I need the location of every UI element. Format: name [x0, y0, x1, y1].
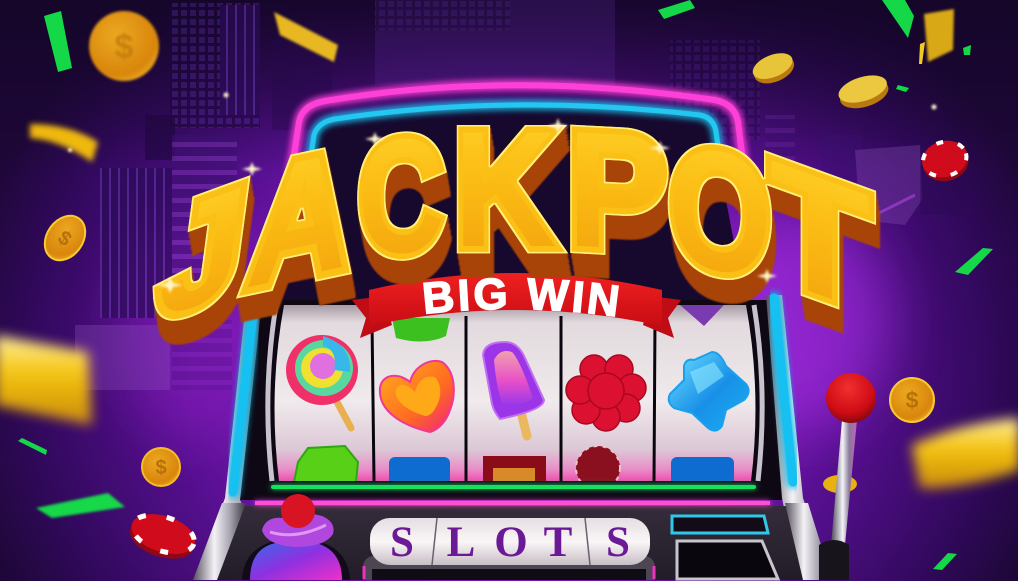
- lever shaft: [831, 420, 857, 545]
- coin: lower left: $: [155, 457, 167, 479]
- coin: top flat: [749, 48, 798, 89]
- reels frame: [232, 300, 798, 500]
- slots text: S: [390, 519, 414, 566]
- big win banner: [369, 273, 662, 326]
- gold streak: upper left: [30, 124, 98, 162]
- slots text: O: [494, 519, 528, 566]
- slot machine: [193, 75, 876, 580]
- left chrome rail: [193, 302, 262, 580]
- jackpot title: P: [567, 97, 667, 286]
- symbol: blue star: [669, 352, 749, 431]
- coin: blurred top left: $: [115, 28, 134, 66]
- right chrome rail: [766, 295, 832, 580]
- cherry: [281, 494, 315, 528]
- coin: left: $: [54, 227, 75, 251]
- symbol: blue candy: [389, 457, 450, 481]
- symbol: heart: [380, 361, 454, 432]
- symbol: diamond top: [680, 305, 724, 326]
- banner text: BIG WIN: [423, 278, 619, 317]
- jackpot title: C: [358, 104, 444, 289]
- cupcake: [242, 494, 350, 580]
- coin: blurred top left: [89, 11, 159, 81]
- gold streak: right: [912, 418, 1018, 488]
- symbol: red square: [483, 456, 546, 481]
- coin: right: [890, 378, 934, 422]
- chip: right: [918, 136, 973, 186]
- coin: right flat: [835, 70, 892, 114]
- reel drum: [275, 305, 755, 481]
- gold bar: top right: [924, 9, 954, 62]
- symbol: lollipop: [286, 335, 358, 428]
- symbol: green cube: [294, 446, 358, 482]
- lower cabinet: [208, 506, 822, 580]
- reels: [271, 305, 756, 490]
- jackpot title: O: [668, 109, 772, 315]
- chip: lower left: [125, 507, 200, 566]
- coins: [36, 11, 934, 486]
- jackpot title: A: [241, 113, 361, 324]
- jackpot title: T: [770, 123, 870, 350]
- neon arch: cyan: [308, 105, 722, 175]
- sparkles: [68, 92, 936, 293]
- green neon line: [271, 485, 756, 489]
- pink neon line: [255, 501, 770, 505]
- left neon tube: [233, 304, 254, 492]
- gold sliver: [919, 42, 925, 64]
- red ribbon tails: [352, 296, 681, 338]
- neon arch: pink: [291, 85, 745, 178]
- lever base: [819, 540, 849, 580]
- gold streak: top center: [274, 12, 338, 62]
- slots text: T: [544, 519, 573, 566]
- right neon tube: [774, 298, 793, 482]
- coin: lower left: [142, 448, 180, 486]
- slots text: [390, 519, 630, 566]
- gold streak: large left: [0, 335, 92, 425]
- control slots: [672, 516, 778, 579]
- reel side chrome: [268, 305, 276, 481]
- jackpot title: K: [454, 97, 556, 281]
- city skyline: [75, 0, 965, 390]
- jackpot title: J: [151, 151, 255, 353]
- right lower chrome: [785, 503, 832, 580]
- lever: [819, 373, 876, 580]
- coin: right: $: [906, 387, 919, 413]
- slots text: L: [447, 519, 475, 566]
- symbol: popsicle: [483, 342, 544, 436]
- lever knob: [826, 373, 876, 423]
- display base: [363, 556, 655, 580]
- coin behind lever: [823, 475, 857, 493]
- slots display: [363, 518, 655, 580]
- left lower chrome: [193, 503, 246, 580]
- cabinet interior: [255, 108, 800, 500]
- coin: left: [36, 208, 94, 268]
- jackpot title: [151, 97, 870, 353]
- symbol: red flower: [566, 355, 646, 431]
- symbol: green candy top: [392, 318, 450, 342]
- slots text: S: [606, 519, 630, 566]
- reel dividers: [372, 316, 655, 481]
- poker chips: [125, 136, 973, 566]
- symbol: poker chip: [575, 445, 621, 481]
- symbol: blue candy right: [671, 457, 734, 481]
